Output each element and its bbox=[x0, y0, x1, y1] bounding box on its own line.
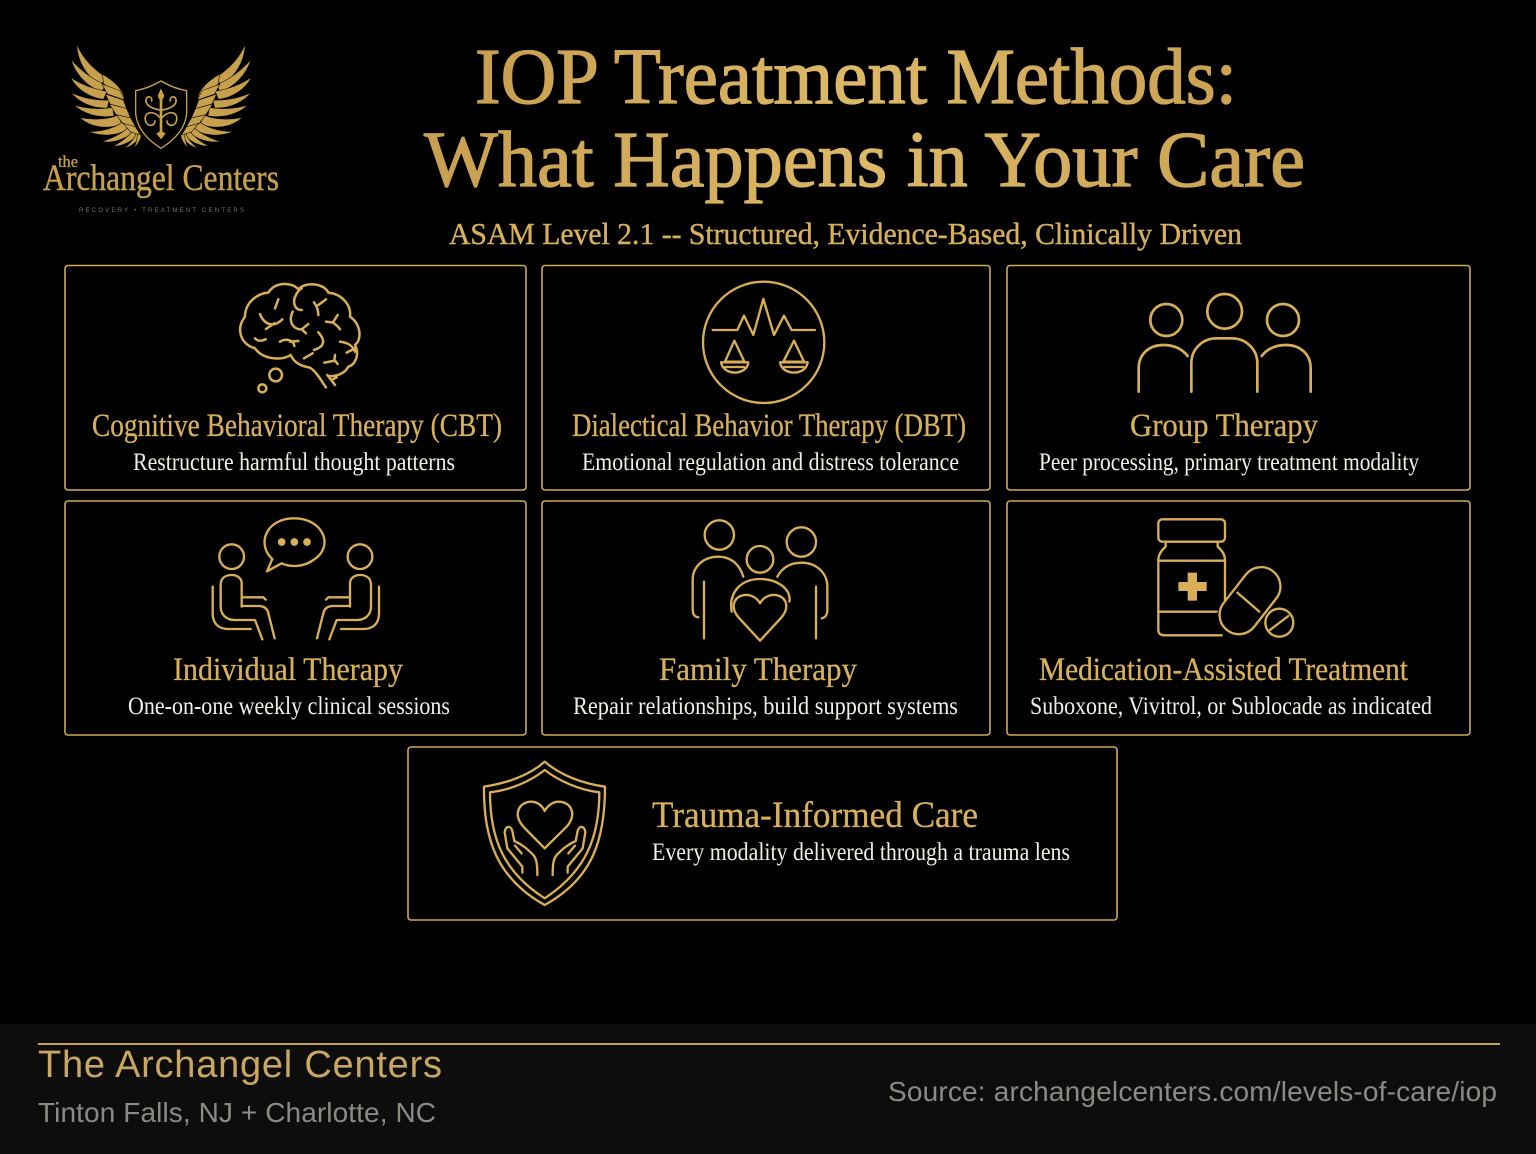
panel: medication-assisted treatment bbox=[1007, 501, 1470, 735]
icon: winged shield bbox=[71, 44, 251, 148]
heading: Individual Therapy bbox=[173, 652, 403, 688]
description: One-on-one weekly clinical sessions bbox=[128, 693, 450, 720]
title: What Happens in Your Care bbox=[424, 117, 1305, 204]
heading: Family Therapy bbox=[659, 652, 857, 688]
panel: family therapy bbox=[542, 501, 990, 735]
logo: The Archangel Centers bbox=[43, 44, 279, 214]
heading: Trauma-Informed Care bbox=[652, 795, 978, 836]
footer organisation name: The Archangel Centers bbox=[38, 1044, 442, 1086]
heading: Dialectical Behavior Therapy (DBT) bbox=[572, 408, 966, 444]
icon: scales with pulse line bbox=[703, 282, 824, 403]
subtitle: ASAM Level 2.1 -- Structured, Evidence-Based, Clinically Driven bbox=[449, 216, 1242, 251]
title bbox=[424, 34, 1305, 204]
description: Emotional regulation and distress tolerance bbox=[582, 449, 959, 476]
logo word: the: the bbox=[58, 152, 78, 171]
footer bbox=[0, 1024, 1536, 1154]
description: Suboxone, Vivitrol, or Sublocade as indicated bbox=[1030, 693, 1432, 720]
heading: Medication-Assisted Treatment bbox=[1039, 652, 1408, 688]
description: Every modality delivered through a trauma lens bbox=[652, 839, 1070, 866]
panel: dialectical behavior therapy bbox=[542, 266, 990, 490]
panel: group therapy bbox=[1007, 266, 1470, 490]
icon: medicine bottle and pills bbox=[1158, 519, 1293, 642]
description: Peer processing, primary treatment modality bbox=[1039, 449, 1419, 476]
description: Repair relationships, build support systems bbox=[573, 693, 958, 720]
logo wordmark: Archangel Centers bbox=[43, 158, 279, 199]
panel: individual therapy bbox=[65, 501, 526, 735]
icon: brain bbox=[240, 284, 360, 392]
icon: three people bbox=[1139, 294, 1311, 392]
heading: Cognitive Behavioral Therapy (CBT) bbox=[92, 408, 502, 444]
icon: shield with heart and hands bbox=[484, 762, 605, 905]
footer source: Source: archangelcenters.com/levels-of-care/iop bbox=[888, 1076, 1497, 1107]
description: Restructure harmful thought patterns bbox=[133, 449, 455, 476]
panel: trauma-informed care bbox=[408, 747, 1117, 920]
icon: family with heart bbox=[693, 520, 827, 641]
footer locations: Tinton Falls, NJ + Charlotte, NC bbox=[38, 1097, 436, 1128]
logo tagline: RECOVERY • TREATMENT CENTERS bbox=[79, 208, 244, 214]
heading: Group Therapy bbox=[1130, 408, 1318, 444]
icon: two people talking bbox=[213, 518, 379, 639]
panel: cognitive behavioral therapy bbox=[65, 266, 526, 490]
title: IOP Treatment Methods: bbox=[475, 34, 1237, 121]
